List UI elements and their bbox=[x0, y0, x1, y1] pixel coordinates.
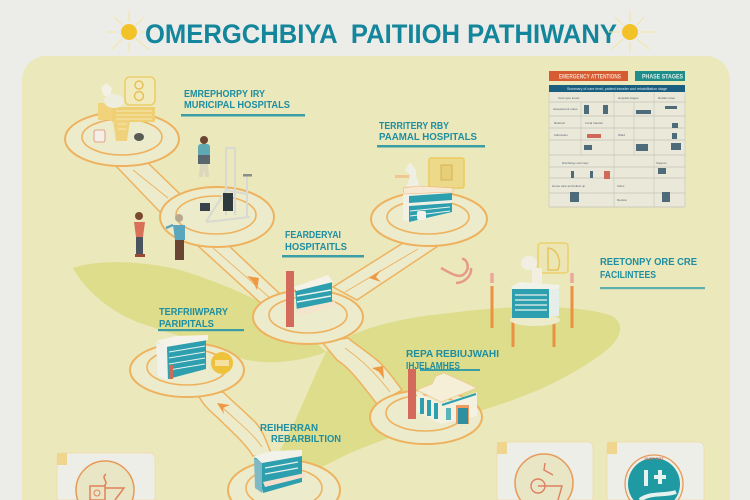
table header: teal tab: PHASE STAGES bbox=[642, 74, 683, 80]
card: teal mobility bbox=[607, 442, 704, 500]
label: federal hospitals: HOSPITAITLS bbox=[285, 241, 347, 253]
label: primary hospitals bbox=[377, 120, 485, 148]
table text: Review bbox=[617, 198, 628, 202]
icon: tube circle bbox=[515, 454, 573, 500]
rings bbox=[253, 290, 363, 344]
label: federal hospitals bbox=[282, 229, 364, 258]
rings bbox=[371, 192, 487, 246]
node: restorative care facility bbox=[441, 243, 572, 347]
node: federal hospitals bbox=[253, 271, 363, 344]
figure: seated clinician bbox=[198, 136, 210, 177]
node: primary hospitals bbox=[371, 158, 487, 246]
label: tertiary hospitals bbox=[158, 306, 244, 331]
table text: Referral bbox=[554, 121, 565, 125]
badge bbox=[57, 453, 67, 465]
icon: clinic building bbox=[417, 373, 477, 424]
table title bar: Summary of care level, patient transfer and rehabilitation stage bbox=[567, 87, 667, 91]
card: left therapy bbox=[57, 453, 155, 500]
table header: red tab: EMERGENCY ATTENTIONS bbox=[559, 74, 621, 80]
table text bbox=[552, 96, 676, 202]
icon: orange posts bbox=[492, 273, 572, 347]
icon: pink hook bbox=[441, 259, 471, 283]
rings bbox=[370, 390, 482, 444]
green region: upper-left blob bbox=[73, 262, 326, 362]
label: municipal hospitals: MURICIPAL HOSPITALS bbox=[184, 99, 290, 111]
road: primary hospital to federal bbox=[333, 243, 438, 300]
title banner bbox=[107, 11, 655, 52]
icon: hospital building bbox=[156, 335, 208, 380]
label: restorative care facilities: FACILINTEES bbox=[600, 269, 656, 281]
table text: Clinic bbox=[617, 184, 625, 188]
table icons bbox=[570, 105, 681, 202]
rings bbox=[160, 187, 274, 247]
label: restorative care facilities: REETONPY ORE CRE bbox=[600, 256, 697, 268]
table text: Home care and follow up bbox=[552, 184, 586, 188]
icon: sign board bbox=[395, 158, 464, 188]
node: municipal hospitals bbox=[65, 77, 179, 166]
label: primary hospitals: TERRITERY RBY bbox=[379, 120, 449, 132]
label: rehabilitation bbox=[260, 422, 341, 445]
label: rehabilitation: REIHERRAN bbox=[260, 422, 318, 434]
badge bbox=[607, 442, 617, 454]
icon: hospital building bbox=[294, 275, 335, 316]
node: rehabilitation building bbox=[228, 450, 340, 500]
title text: OMERGCHBIYA PAITIIOH PATHIWANY bbox=[145, 19, 617, 49]
icon: building bbox=[510, 282, 560, 326]
card: pharmacy tube bbox=[497, 442, 593, 500]
icon: therapy circle bbox=[76, 461, 134, 500]
label: restorative care facilities bbox=[600, 256, 705, 289]
green region: central blob bbox=[268, 307, 620, 478]
label: repa rehabilitation: IHJELAMHES bbox=[406, 360, 460, 372]
table text: Rehab notes bbox=[658, 96, 676, 100]
figure: patient standing bbox=[134, 212, 145, 257]
label: primary hospitals: PAAMAL HOSPITALS bbox=[379, 131, 477, 143]
road: federal to rehabilitation hospital bbox=[322, 338, 402, 404]
road: municipal to centre bbox=[115, 162, 180, 212]
icon: teal circle: SUPPORT bbox=[644, 456, 664, 461]
table text: Hospital stages bbox=[618, 96, 639, 100]
icon: rehab machine bbox=[200, 148, 252, 222]
table text: Care type levels bbox=[558, 96, 580, 100]
label: repa rehabilitation bbox=[406, 348, 499, 372]
label: tertiary hospitals: PARIPITALS bbox=[159, 318, 214, 330]
icon: right sun bbox=[608, 11, 655, 52]
badge bbox=[497, 442, 507, 454]
table text: Support bbox=[656, 161, 667, 165]
icon: left sun bbox=[107, 11, 152, 52]
table text: Discharge summary bbox=[562, 161, 589, 165]
label: municipal hospitals bbox=[181, 88, 305, 116]
table text: Ward bbox=[618, 133, 625, 137]
node: repa rehabilitation bbox=[370, 369, 482, 444]
arrow bbox=[369, 270, 381, 282]
icon: tower bbox=[286, 271, 294, 327]
table text: Admission bbox=[554, 133, 568, 137]
label: municipal hospitals: EMREPHORPY IRY bbox=[184, 88, 265, 100]
rings bbox=[130, 343, 244, 397]
road: centre to federal bbox=[197, 245, 280, 307]
figure: doctor bbox=[166, 214, 185, 260]
icon: hospital building bbox=[403, 186, 453, 222]
table text: Assessment notes bbox=[553, 107, 578, 111]
arrow bbox=[372, 366, 384, 379]
figure at entrance bbox=[169, 365, 173, 379]
table text: Local transfer bbox=[585, 121, 603, 125]
label: federal hospitals: FEARDERYAI bbox=[285, 229, 341, 241]
road: rehabilitation to tertiary bbox=[198, 392, 272, 456]
node: centre rehabilitation equipment bbox=[160, 148, 274, 247]
icon: tower bbox=[408, 369, 416, 419]
label: tertiary hospitals: TERFRIIWPARY bbox=[159, 306, 228, 318]
reference table bbox=[549, 71, 685, 207]
node: tertiary hospitals bbox=[130, 335, 244, 397]
icon: hospital building bbox=[254, 450, 305, 493]
label: rehabilitation: REBARBILTION bbox=[271, 433, 341, 445]
icon: sign board bbox=[521, 243, 568, 284]
table body bbox=[549, 92, 685, 207]
label: repa rehabilitation: REPA REBIUJWAHI bbox=[406, 348, 499, 360]
arrow bbox=[217, 403, 230, 414]
rings bbox=[228, 460, 340, 500]
icon: gold hospital building bbox=[94, 77, 155, 142]
rings bbox=[65, 112, 179, 166]
icon: gold badge bbox=[211, 352, 233, 374]
arrow bbox=[247, 276, 259, 290]
